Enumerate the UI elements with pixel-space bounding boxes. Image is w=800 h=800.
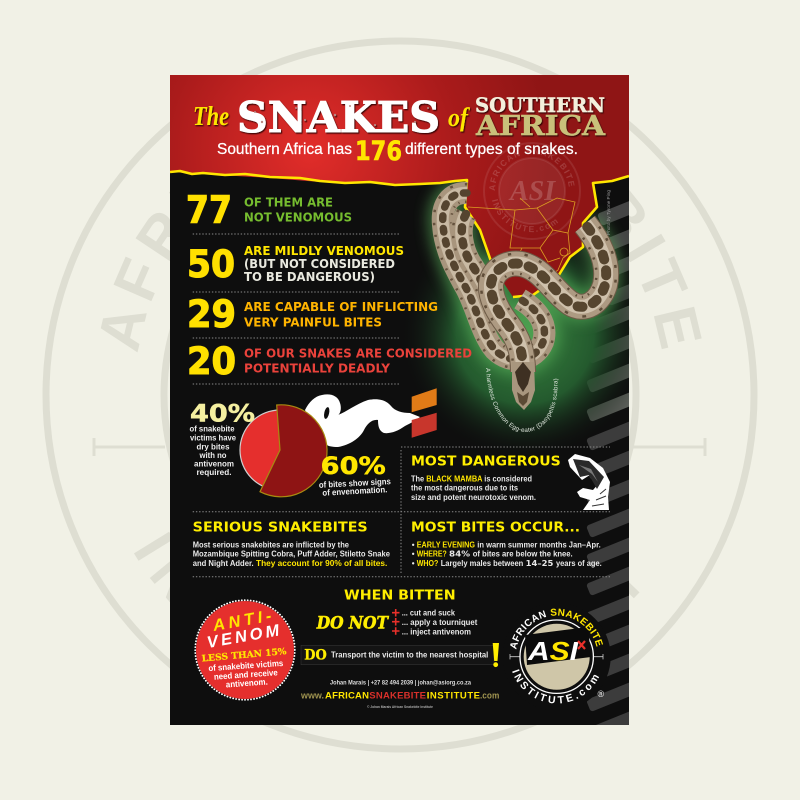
subtitle: different types of snakes. [405, 141, 578, 158]
anti-venom badge: LESS THAN 15% [201, 647, 287, 664]
subtitle: 176 [355, 136, 402, 167]
ASI logo: ® [598, 689, 604, 699]
faint logo watermark on Africa: AFRICAN SNAKEBITE [489, 148, 574, 191]
stat: 50: (BUT NOT CONSIDERED [244, 257, 395, 271]
poster [170, 75, 629, 725]
stat: 20: OF OUR SNAKES ARE CONSIDERED [244, 346, 472, 361]
panel: most dangerous: The BLACK MAMBA is considered [411, 474, 532, 483]
green glow behind snake [418, 182, 629, 442]
panel: most bites occur: 84% [449, 550, 470, 559]
stat: 77 [188, 194, 352, 224]
title [194, 97, 608, 138]
snake caption: A harmless Common Egg-eater (Dasypeltis scabra) [486, 368, 559, 432]
40 percent label: 40% [190, 400, 255, 428]
do not list: ... cut and suck [402, 608, 455, 618]
subtitle: Southern Africa has [217, 141, 352, 158]
contact details: www. [300, 690, 324, 700]
panel: most dangerous: size and potent neurotoxic venom. [411, 493, 536, 502]
faint logo watermark on Africa: ASI [508, 176, 556, 207]
of: of [448, 103, 470, 132]
watermark logo [42, 38, 758, 752]
icon: black mamba head [568, 454, 610, 510]
panel: most bites occur: in warm summer months Jan–Apr. [477, 540, 601, 549]
40 percent label: antivenom [194, 459, 234, 469]
stat: 50: TO BE DANGEROUS) [244, 270, 375, 284]
snake photo illustration [443, 193, 606, 410]
panel: most bites occur: years of age. [556, 559, 602, 568]
panel: most bites occur: • [412, 559, 415, 568]
anti-venom badge: ANTI- [211, 607, 273, 635]
stat: 50: 50 [187, 243, 235, 286]
60 percent label: 60% [321, 452, 386, 480]
do box: Transport the victim to the nearest hospital [331, 649, 488, 659]
panel: most bites occur: • [412, 550, 415, 559]
do not list: ... apply a tourniquet [402, 617, 477, 627]
40 percent label: victims have [190, 433, 236, 443]
40 percent label: required. [196, 467, 232, 477]
panel: most bites occur: EARLY EVENING [417, 540, 475, 549]
anti-venom badge: VENOM [206, 621, 282, 652]
stat: 20: 20 [187, 340, 236, 383]
photo credit: Photo by Tyrone Ping [606, 190, 611, 235]
panel: when bitten: WHEN BITTEN [344, 587, 456, 603]
red header with Africa shape [170, 75, 629, 297]
contact details: SNAKEBITE [369, 690, 426, 701]
panel: serious snakebites: They account for 90% of all bites. [256, 559, 387, 568]
contact details: .com [480, 690, 499, 700]
icon: exclamation [493, 643, 499, 667]
panel: serious snakebites [193, 519, 391, 568]
panel: when bitten [301, 587, 499, 667]
faint logo watermark on Africa [483, 142, 581, 240]
stat: 50: ARE MILDLY VENOMOUS [244, 244, 404, 258]
do box [301, 643, 499, 667]
contact details: INSTITUTE [427, 690, 480, 701]
white snake silhouette [305, 394, 420, 447]
watermark logo: AFRICAN SNAKEBITE [101, 190, 702, 352]
torn yellow edge [170, 171, 629, 297]
The: The [193, 101, 229, 131]
60 percent label: of bites show signs [319, 476, 391, 490]
panel: most dangerous [411, 453, 610, 510]
panel: most dangerous: MOST DANGEROUS [411, 453, 561, 469]
stat: 20 [189, 346, 472, 375]
40 percent label: dry bites [196, 441, 230, 451]
anti-venom badge: antivenom. [225, 677, 268, 689]
panel: most bites occur: • [412, 540, 415, 549]
40 percent label: of snakebite [190, 424, 235, 434]
stat: 77: OF THEM ARE [244, 195, 333, 210]
stat: 77: NOT VENOMOUS [244, 210, 352, 225]
panel: most bites occur: of bites are below the knee. [473, 550, 573, 559]
panel: serious snakebites: and Night Adder. [193, 559, 254, 568]
stat: 50 [189, 246, 404, 283]
ASI logo: INSTITUTE.com [512, 669, 600, 704]
SOUTHERN: SOUTHERN [475, 94, 605, 117]
country borders [468, 198, 575, 280]
diagonal stripes [587, 201, 629, 725]
60 percent label [319, 456, 391, 496]
contact details: AFRICAN [325, 690, 369, 701]
ASI logo: ASI [527, 636, 579, 666]
anti-venom badge [195, 600, 295, 700]
contact details: © Johan Marais African Snakebite Institute [367, 705, 433, 709]
60 percent label: of envenomation. [322, 484, 388, 498]
do not list [316, 608, 477, 636]
panel: most bites occur: WHERE? [417, 550, 447, 559]
anti-venom badge: need and receive [214, 667, 278, 682]
ASI logo [510, 608, 610, 704]
anti-venom badge: of snakebite victims [208, 658, 284, 673]
panel: most bites occur: WHO? [417, 559, 438, 568]
watermark logo: INSTITUTE.com [134, 532, 640, 602]
panel: serious snakebites: Mozambique Spitting Cobra, Puff Adder, Stiletto Snake [193, 550, 391, 559]
contact details [300, 679, 499, 709]
40 percent label: with no [199, 450, 226, 460]
AFRICA: AFRICA [475, 111, 606, 142]
panel: most bites occur: MOST BITES OCCUR... [411, 519, 580, 535]
panel: most bites occur: Largely males between [441, 559, 523, 568]
subtitle [218, 140, 577, 161]
contact details: Johan Marais | +27 82 494 2039 | johan@asiorg.co.za [330, 679, 471, 686]
stat: 29: ARE CAPABLE OF INFLICTING [244, 299, 438, 314]
panel: most dangerous: the most dangerous due to its [411, 484, 519, 493]
faint logo watermark on Africa: INSTITUTE.com [492, 199, 558, 232]
stat: 29: VERY PAINFUL BITES [244, 315, 382, 330]
panel: serious snakebites: SERIOUS SNAKEBITES [193, 519, 368, 535]
do box: DO [304, 647, 327, 663]
SNAKES: SNAKES [237, 93, 440, 142]
do not list: ... inject antivenom [402, 626, 471, 636]
pie chart [240, 405, 327, 497]
stat: 29: 29 [187, 293, 236, 336]
stat: 29 [189, 298, 438, 328]
panel: most bites occur [411, 519, 602, 568]
orange and red tags [412, 388, 437, 438]
do not list: DO NOT [316, 613, 389, 633]
stat: 77: 77 [186, 189, 232, 232]
ASI logo: AFRICAN SNAKEBITE [510, 608, 603, 650]
stat: 20: POTENTIALLY DEADLY [244, 361, 391, 376]
40 percent label [190, 400, 255, 477]
panel: serious snakebites: Most serious snakebites are inflicted by the [193, 540, 350, 549]
panel: most bites occur: 14–25 [526, 559, 554, 568]
